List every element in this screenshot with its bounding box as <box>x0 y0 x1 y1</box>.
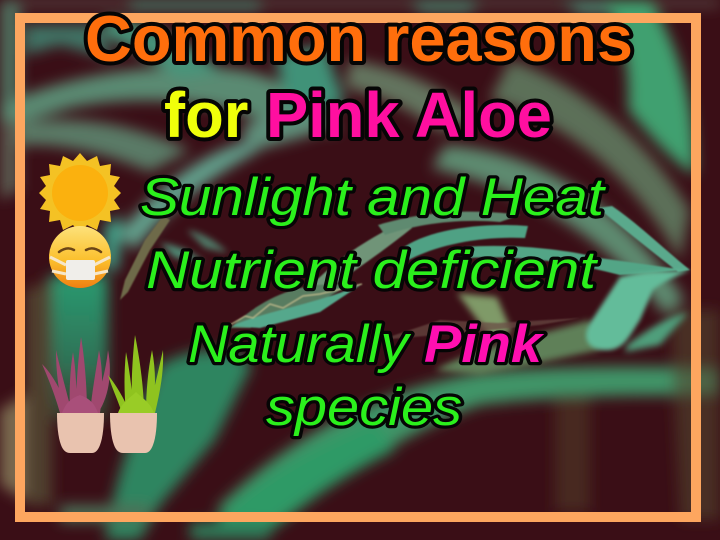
icon: green aloe in pot <box>108 335 163 453</box>
text: Naturally Pink: Naturally Pink <box>188 315 545 374</box>
text: Sunlight and Heat: Sunlight and Heat <box>140 168 606 227</box>
green plant pot <box>110 413 157 453</box>
title line: Common reasons: Common reasons <box>85 2 633 75</box>
title line: for Pink Aloe: for Pink Aloe <box>164 79 552 151</box>
olive thin leaf <box>120 216 170 300</box>
text: species: species <box>266 378 462 437</box>
icon: sun <box>39 153 121 233</box>
title <box>85 2 633 151</box>
text: Nutrient deficient: Nutrient deficient <box>146 241 599 300</box>
icon: pink aloe in pot <box>42 337 110 453</box>
icon: face with medical mask <box>49 226 111 288</box>
upper gray-green blades <box>310 218 412 292</box>
pink plant pot <box>57 413 104 453</box>
serrated teal leaf <box>586 270 690 350</box>
centre leaf <box>230 284 350 328</box>
